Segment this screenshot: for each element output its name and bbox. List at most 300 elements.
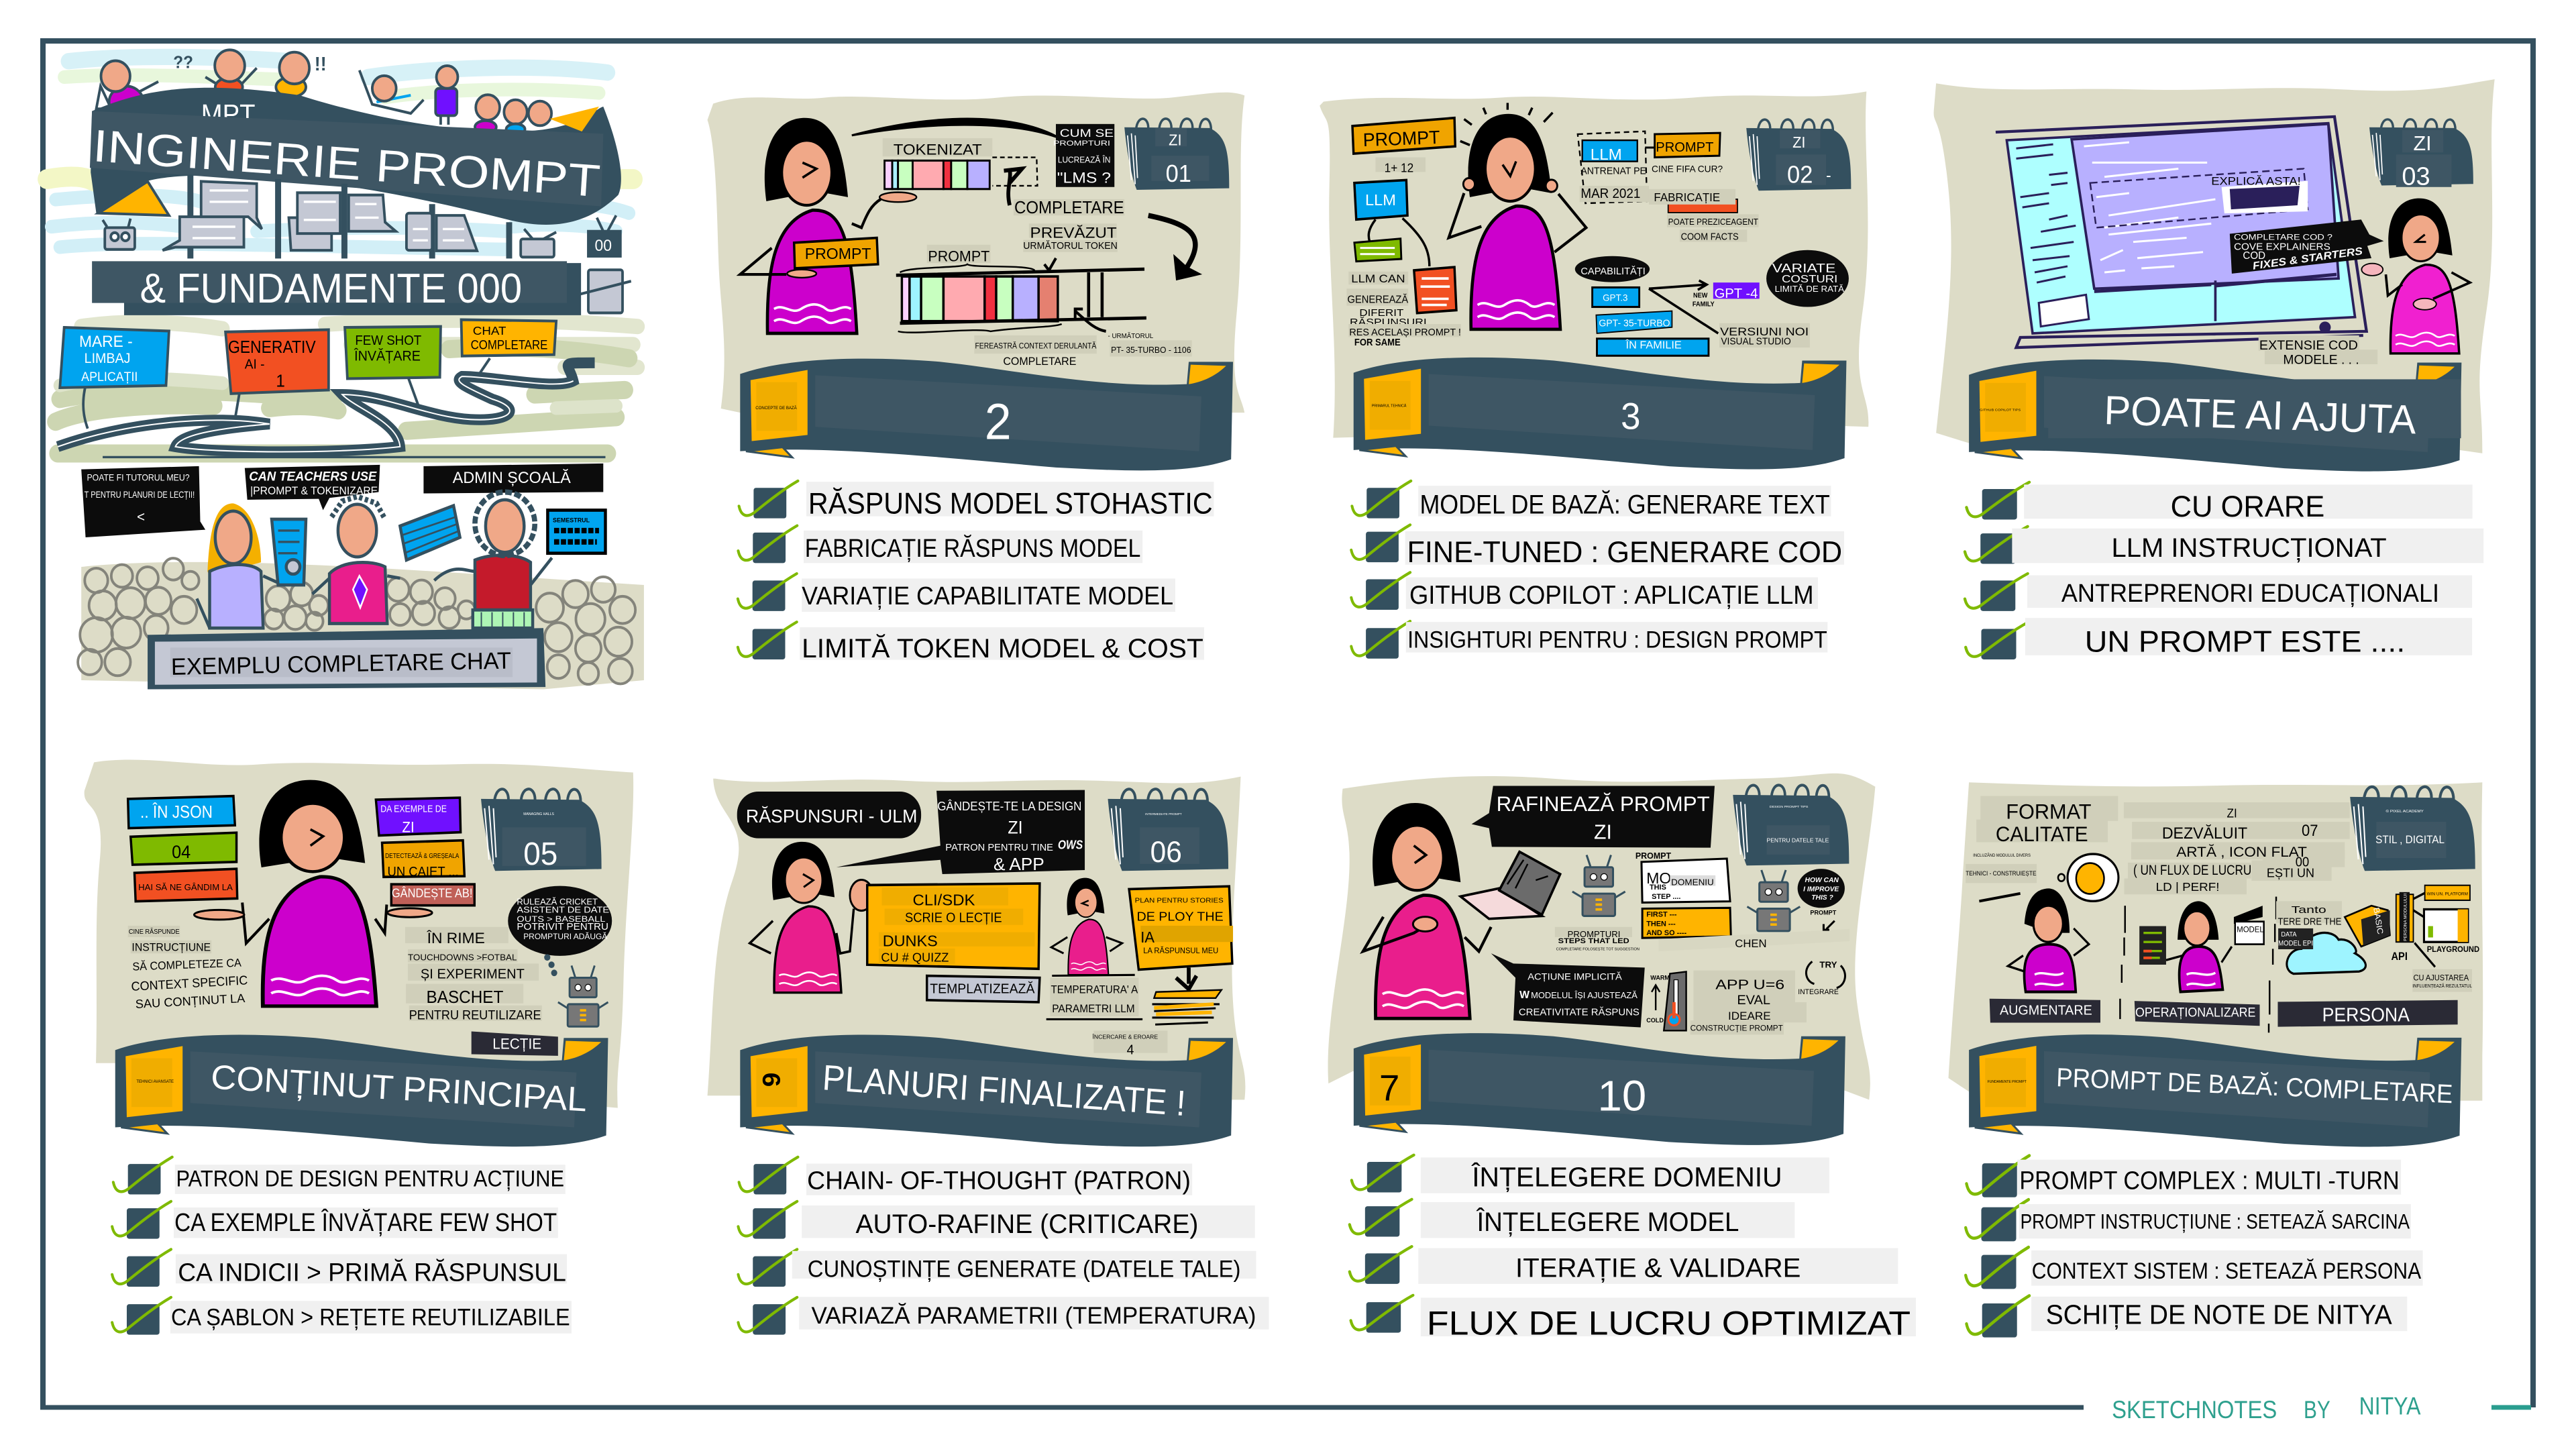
checklist: CA ȘABLON > REȚETE REUTILIZABILE — [171, 1305, 570, 1331]
llm fabricates: POATE PREZICEAGENT — [1668, 217, 1758, 227]
example sign: EXEMPLU COMPLETARE CHAT — [171, 648, 511, 680]
panel: day 7 refine — [1328, 773, 1916, 1342]
calendar: MANAGING HALLS — [523, 812, 554, 816]
checklist: CA EXEMPLE ÎNVĂȚARE FEW SHOT — [174, 1208, 557, 1236]
llm fabricates: MAR 2021 — [1580, 186, 1640, 201]
lesson tag — [472, 1032, 558, 1056]
try loop: INTEGRARE — [1798, 988, 1839, 996]
checklist: LLM INSTRUCȚIONAT — [2112, 533, 2387, 563]
speech boxes: POATE FI TUTORUL MEU? — [87, 472, 190, 483]
checklist: PROMPT COMPLEX : MULTI -TURN — [2019, 1166, 2400, 1195]
thought cloud and robot — [508, 886, 612, 1026]
cost cloud: LIMITĂ DE RATĂ — [1775, 284, 1844, 294]
robots: 00 — [595, 237, 612, 255]
left caption: RĂSPUNSURI — [1350, 316, 1427, 328]
prompt cards: DOMENIU — [1671, 877, 1714, 887]
trial and error: 4 — [1127, 1042, 1134, 1058]
templates tag — [927, 976, 1040, 1002]
middle caption: DEZVĂLUIT — [2162, 824, 2247, 842]
small person — [1051, 878, 1122, 975]
banner: CONCEPTE DE BAZĂ — [755, 405, 797, 411]
temperature speech: ACȚIUNE IMPLICITĂ — [1527, 971, 1623, 982]
thermometer: WARM — [1650, 975, 1670, 981]
persona tag — [2277, 1000, 2458, 1027]
cloud model and API — [2276, 885, 2479, 992]
middle caption: ZI — [2227, 806, 2237, 820]
augmentation tag: AUGMENTARE — [2000, 1003, 2092, 1018]
signature: SKETCHNOTES — [2112, 1395, 2277, 1424]
checklist: ÎNȚELEGERE DOMENIU — [1471, 1161, 1782, 1192]
temperature speech: CREATIVITATE RĂSPUNS — [1519, 1006, 1640, 1018]
sliding window diagram: - URMĂTORUL — [1108, 333, 1153, 340]
calendar — [481, 789, 602, 872]
cloud model and API: BASIC — [2371, 906, 2385, 935]
prompt cards: THIS — [1650, 883, 1666, 892]
checklist: CHAIN- OF-THOUGHT (PATRON) — [807, 1167, 1191, 1195]
calendar: DESIGN PROMPT TIPS — [1770, 805, 1808, 809]
checklist — [1350, 1155, 1916, 1342]
templates tag: TEMPLATIZEAZĂ — [930, 981, 1035, 997]
checklist: CU ORARE — [2171, 489, 2324, 523]
middle caption: EȘTI UN — [2267, 866, 2314, 880]
checklist — [112, 1157, 572, 1335]
thermometer: COLD — [1646, 1017, 1664, 1024]
operationalization tag: OPERAȚIONALIZARE — [2135, 1005, 2255, 1020]
speech box — [1472, 786, 1715, 848]
calendar: © PIXEL ACADEMY — [2385, 809, 2424, 814]
extension caption: MODELE . . . — [2283, 352, 2359, 367]
cloud model and API: PERSONA MODULULUI — [2403, 894, 2408, 941]
labels right — [376, 798, 474, 906]
sign: few shot — [345, 327, 441, 378]
banner: 7 — [1379, 1068, 1399, 1109]
design speech box: & APP — [994, 855, 1044, 874]
question box: "LMS ? — [1057, 170, 1111, 186]
checklist: MODEL DE BAZĂ: GENERARE TEXT — [1419, 490, 1830, 520]
capabilities tree: NEW — [1693, 292, 1708, 300]
right caption — [405, 927, 542, 1022]
sliding window diagram: PT- 35-TURBO - 1106 — [1111, 345, 1191, 355]
prompt cards: STEP .... — [1652, 893, 1680, 901]
signature: BY — [2304, 1395, 2330, 1424]
speech boxes: CAN TEACHERS USE — [249, 469, 377, 484]
llm fabricates: CINE FIFA CUR? — [1652, 164, 1723, 174]
person with laptop — [1363, 803, 1560, 1018]
speech bubble — [2230, 219, 2383, 274]
top-left caption: INCLUZÂND MODULUL DIVERS — [1973, 852, 2031, 858]
app captions: EVAL — [1737, 993, 1770, 1008]
right caption: ȘI EXPERIMENT — [421, 967, 525, 982]
banner: PLANURI FINALIZATE ! — [821, 1058, 1187, 1124]
sign: chat completion: COMPLETARE — [471, 337, 547, 352]
cloud model and API: INFLUENȚEAZĂ REZULTATUL — [2412, 982, 2472, 989]
calendar: ZI — [1792, 133, 1805, 151]
cloud model and API: CU AJUSTAREA — [2413, 973, 2469, 983]
speech bubble: FIXES & STARTERS — [2252, 246, 2363, 272]
extension caption: EXTENSIE COD — [2259, 338, 2358, 353]
operationalization tag — [2135, 1001, 2260, 1026]
banner — [740, 359, 1233, 470]
checklist: FLUX DE LUCRU OPTIMIZAT — [1427, 1305, 1911, 1342]
calendar — [2350, 787, 2475, 871]
subtitle banner: & FUNDAMENTE 000 — [140, 264, 522, 311]
try loop: TRY — [1819, 959, 1837, 969]
thought cloud and robot: POTRIVIT PENTRU — [517, 922, 608, 932]
left caption: CONTEXT SPECIFIC — [131, 973, 248, 994]
signature — [2112, 1392, 2421, 1424]
app captions: CONSTRUCȚIE PROMPT — [1690, 1023, 1783, 1032]
orange board — [867, 883, 1040, 969]
calendar: 02 — [1787, 161, 1813, 189]
panel: title: !! — [315, 53, 327, 74]
cloud model and API: Tanto — [2292, 904, 2326, 916]
capabilities tree: FAMILY — [1693, 301, 1715, 308]
question box: CUM SE — [1060, 127, 1114, 140]
lightbulb person — [2008, 854, 2118, 992]
checklist: SCHIȚE DE NOTE DE NITYA — [2046, 1300, 2392, 1330]
crowd — [78, 558, 635, 684]
prompt cards: AND SO ---- — [1646, 929, 1686, 937]
extension caption — [2259, 335, 2377, 367]
panel: title: ?? — [173, 53, 193, 72]
cloud model and API: TERE DRE THE — [2277, 916, 2341, 928]
capabilities tree: GPT- 35-TURBO — [1599, 318, 1670, 329]
right caption: PENTRU REUTILIZARE — [409, 1008, 541, 1022]
checklist — [1351, 481, 1844, 659]
sliding window diagram: PROMPT — [928, 248, 989, 265]
checklist — [1965, 482, 2483, 659]
sign: large language: APLICAȚII — [81, 369, 138, 384]
prompt cards — [1635, 851, 1731, 938]
prompt cards: FIRST --- — [1646, 911, 1677, 919]
sign: few shot: FEW SHOT — [355, 333, 421, 348]
banner — [1969, 1034, 2461, 1147]
tokenized diagram: TOKENIZAT — [894, 142, 982, 158]
chain strip: CHEN — [1735, 937, 1767, 950]
banner — [740, 1035, 1233, 1146]
right caption: BASCHET — [427, 989, 503, 1007]
prompt to llm — [1352, 118, 1456, 313]
trial and error: ÎNCERCARE & EROARE — [1091, 1034, 1158, 1040]
app captions: IDEARE — [1728, 1010, 1771, 1022]
banner: TEHNICI AVANSATE — [136, 1079, 174, 1084]
llm fabricates: LLM — [1591, 146, 1622, 163]
lesson tag: LECȚIE — [492, 1036, 541, 1053]
checklist: PATRON DE DESIGN PENTRU ACȚIUNE — [176, 1167, 564, 1192]
robot improve: HOW CAN — [1805, 877, 1839, 884]
signature: NITYA — [2359, 1392, 2421, 1420]
design speech box — [837, 790, 1085, 874]
middle caption: LD | PERF! — [2156, 880, 2220, 894]
right caption: ÎN RIME — [427, 929, 485, 947]
thought cloud and robot: OUTS > BASEBALL — [517, 914, 606, 924]
robot improve: THIS ? — [1811, 894, 1834, 902]
calendar: STIL , DIGITAL — [2375, 834, 2445, 846]
main banner — [90, 88, 621, 225]
calendar — [2369, 119, 2473, 191]
calendar: INTERMEDIATE PROMPT — [1145, 812, 1182, 816]
labels left — [128, 796, 237, 902]
orange board: SCRIE O LECȚIE — [905, 910, 1002, 926]
thought cloud and robot: ASISTENT DE DATE — [517, 904, 610, 915]
person with tokens: PROMPT — [805, 245, 871, 262]
sliding window diagram: PREVĂZUT — [1030, 224, 1117, 241]
capabilities tree — [1575, 256, 1810, 356]
speech box: RAFINEAZĂ PROMPT — [1497, 792, 1710, 816]
middle caption — [2124, 802, 2350, 894]
teachers: SEMESTRUL — [553, 517, 590, 524]
cost cloud: VARIATE — [1772, 262, 1836, 275]
top-left caption: TEHNICI - CONSTRUIEȘTE — [1966, 869, 2036, 877]
speech bubble: COD — [2243, 250, 2265, 262]
checklist: ANTREPRENORI EDUCAȚIONALI — [2061, 580, 2439, 608]
subtitle banner — [92, 261, 581, 315]
speech boxes: ADMIN ȘCOALĂ — [453, 468, 571, 487]
banner: CONȚINUT PRINCIPAL — [210, 1057, 588, 1119]
banner: PROMPT DE BAZĂ: COMPLETARE — [2056, 1063, 2453, 1109]
design speech box: PATRON PENTRU TINE — [945, 843, 1053, 853]
sign: generative: 1 — [276, 372, 285, 391]
checklist: VARIAZĂ PARAMETRII (TEMPERATURA) — [812, 1302, 1256, 1329]
speech boxes: T PENTRU PLANURI DE LECȚII! — [85, 490, 195, 500]
person with tokens — [740, 118, 916, 333]
speech boxes: |PROMPT & TOKENIZARE — [250, 484, 378, 497]
speech boxes — [81, 464, 603, 537]
checklist — [738, 481, 1214, 663]
sign: large language: MARE - — [79, 333, 133, 351]
cloud model and API: API — [2391, 951, 2408, 963]
temperature speech: W — [1519, 989, 1529, 1001]
temperature caption: TEMPERATURA' A — [1051, 984, 1138, 996]
left caption — [1346, 272, 1461, 348]
speech boxes: < — [137, 509, 145, 525]
llm fabricates — [1578, 131, 1759, 243]
banner — [1969, 360, 2461, 472]
robot improve: PROMPT — [1810, 910, 1837, 916]
speech bubble: COVE EXPLAINERS — [2234, 242, 2330, 253]
right caption: TOUCHDOWNS >FOTBAL — [408, 952, 517, 963]
calendar: PENTRU DATELE TALE — [1767, 837, 1829, 844]
app captions: APP U=6 — [1715, 977, 1784, 993]
checklist: ITERAȚIE & VALIDARE — [1515, 1254, 1801, 1283]
banner — [1354, 358, 1846, 470]
prompt to llm: 1+ 12 — [1385, 161, 1413, 174]
left caption: CINE RĂSPUNDE — [129, 927, 180, 936]
calendar: 01 — [1166, 160, 1191, 187]
temperature speech — [1491, 953, 1645, 1027]
sign: generative: AI - — [245, 357, 265, 372]
temperature caption — [1046, 975, 1142, 1019]
panel: day 6 plans — [708, 777, 1269, 1335]
top-left caption — [1966, 796, 2118, 901]
prompt to llm: LLM — [1365, 192, 1396, 209]
responses cloud — [737, 792, 921, 839]
orange board: CLI/SDK — [912, 892, 975, 909]
capabilities tree: ÎN FAMILIE — [1625, 339, 1682, 351]
checklist: GITHUB COPILOT : APLICAȚIE LLM — [1409, 581, 1814, 610]
left caption: FOR SAME — [1354, 337, 1401, 348]
question box — [1053, 124, 1114, 187]
speech box: ZI — [1594, 821, 1612, 843]
panel: day 1 concepts — [708, 93, 1244, 663]
robot teacher — [1555, 855, 1640, 951]
checklist: UN PROMPT ESTE .... — [2085, 625, 2405, 658]
banner: 2 — [985, 393, 1012, 450]
labels right: ZI — [402, 819, 415, 836]
thought cloud and robot: RULEAZĂ CRICKET — [517, 896, 598, 907]
prompt cards: THEN --- — [1646, 920, 1676, 928]
labels right: DA EXEMPLE DE — [380, 804, 447, 814]
teachers — [197, 492, 605, 628]
llm fabricates: COOM FACTS — [1681, 231, 1739, 243]
labels left: HAI SĂ NE GÂNDIM LA — [138, 882, 233, 892]
calendar — [1746, 119, 1851, 191]
sign: generative: GENERATIV — [228, 337, 316, 357]
trial and error — [1091, 1030, 1167, 1058]
capabilities tree: GPT.3 — [1603, 292, 1627, 303]
tokenized diagram — [852, 119, 1124, 217]
augmentation tag — [1990, 999, 2100, 1023]
left caption: SĂ COMPLETEZE CA — [132, 956, 241, 973]
plan box and stack: DE PLOY THE — [1137, 910, 1224, 924]
app captions — [1690, 971, 1807, 1034]
capabilities tree: VERSIUNI NOI — [1720, 325, 1809, 338]
robot teacher: STEPS THAT LED — [1558, 937, 1629, 945]
panel: day 3 how AI helps — [1934, 79, 2495, 659]
checklist: CUNOȘTINȚE GENERATE (DATELE TALE) — [808, 1256, 1241, 1283]
screen: EXPLICĂ ASTA! — [2211, 175, 2301, 188]
checklist: INSIGHTURI PENTRU : DESIGN PROMPT — [1407, 627, 1827, 653]
llm fabricates: FABRICAȚIE — [1654, 191, 1720, 204]
checklist: AUTO-RAFINE (CRITICARE) — [856, 1210, 1198, 1239]
labels left: 04 — [172, 841, 191, 862]
checklist: VARIAȚIE CAPABILITATE MODEL — [802, 582, 1173, 610]
banner — [1354, 1033, 1845, 1145]
checklist: PROMPT INSTRUCȚIUNE : SETEAZĂ SARCINA — [2021, 1210, 2410, 1234]
person shrug — [194, 780, 432, 1006]
banner: POATE AI AJUTA — [2103, 387, 2417, 442]
design speech box: GÂNDEȘTE-TE LA DESIGN — [937, 798, 1081, 813]
checklist — [738, 1157, 1269, 1335]
sign: chat completion — [462, 320, 556, 356]
calendar — [1108, 789, 1228, 871]
middle caption: ARTĂ , ICON FLAT — [2176, 844, 2307, 860]
cost cloud: COSTURI — [1782, 274, 1837, 285]
robot improve: I IMPROVE — [1803, 885, 1839, 893]
left caption: GENEREAZĂ — [1348, 294, 1409, 306]
prompt cards: PROMPT — [1635, 851, 1671, 861]
design speech box: OWS — [1058, 838, 1083, 852]
sign: large language — [60, 327, 169, 388]
robot improve — [1747, 869, 1845, 931]
calendar — [1733, 785, 1849, 865]
panel: day 8 basic prompt — [1948, 782, 2483, 1424]
labels right: GÂNDEȘTE AB! — [392, 885, 472, 900]
left caption: RES ACELAȘI PROMPT ! — [1349, 327, 1461, 338]
plan box and stack: PLAN PENTRU STORIES — [1135, 897, 1224, 905]
left caption — [128, 926, 248, 1011]
sign: chat completion: CHAT — [473, 324, 506, 337]
road map — [58, 358, 605, 457]
capabilities tree: GPT -4 — [1715, 286, 1758, 301]
calendar: 03 — [2402, 163, 2430, 191]
responses cloud: RĂSPUNSURI - ULM — [746, 805, 917, 826]
plan box and stack — [1129, 886, 1233, 1024]
labels left: .. ÎN JSON — [140, 803, 213, 822]
screen — [1996, 117, 2367, 347]
checklist: RĂSPUNS MODEL STOHASTIC — [808, 486, 1213, 521]
top-left caption: FORMAT — [2006, 800, 2092, 824]
plan box and stack: IA — [1140, 928, 1155, 946]
capabilities tree: CAPABILITĂȚI — [1580, 266, 1646, 277]
person thinking — [1449, 103, 1586, 329]
sign: large language: LIMBAJ — [85, 350, 131, 366]
robot teacher: PROMPTURI — [1568, 929, 1620, 939]
try loop — [1798, 959, 1845, 996]
banner: 10 — [1597, 1073, 1646, 1120]
prompt cards: MO — [1646, 869, 1671, 887]
robot teacher: COMPLETARE FOLOSEȘTE TOT SUGGESTION — [1556, 947, 1640, 951]
title text: INGINERIE PROMPT — [91, 120, 602, 207]
chain strip — [1658, 929, 1849, 951]
tokenized diagram: COMPLETARE — [1014, 199, 1124, 217]
cloud model and API: PLAYGROUND — [2427, 945, 2479, 954]
calendar: - — [1826, 167, 1831, 185]
llm fabricates: ANTRENAT PE — [1580, 166, 1646, 176]
question box: PROMPTURI — [1053, 140, 1110, 148]
cloud model and API: DATA — [2281, 931, 2297, 938]
main banner: MPT — [201, 99, 256, 129]
orange board: CU # QUIZZ — [881, 951, 949, 964]
orange board: DUNKS — [883, 932, 938, 949]
banner: FUNDAMENTE PROMPT — [1988, 1080, 2027, 1084]
calendar: ZI — [1169, 131, 1182, 148]
checklist: FINE-TUNED : GENERARE COD — [1407, 535, 1842, 569]
checklist — [1966, 1156, 2423, 1338]
left caption: SAU CONȚINUT LA — [135, 991, 246, 1011]
plan box and stack: LA RĂSPUNSUL MEU — [1143, 947, 1218, 955]
question box: LUCREAZĂ ÎN — [1058, 154, 1111, 164]
banner: 3 — [1621, 395, 1640, 437]
people on banner — [97, 50, 551, 135]
temperature caption: PARAMETRI LLM — [1052, 1002, 1135, 1015]
left caption: LLM CAN — [1351, 272, 1405, 285]
sliding window diagram — [896, 215, 1202, 368]
checklist: CA INDICII > PRIMĂ RĂSPUNSUL — [178, 1258, 566, 1287]
ops person — [2120, 897, 2276, 1032]
banner: 6 — [757, 1073, 784, 1087]
middle caption: ( UN FLUX DE LUCRU — [2133, 862, 2251, 878]
cost cloud — [1766, 250, 1849, 307]
sign: few shot: ÎNVĂȚARE — [354, 348, 421, 364]
banner: GITHUB COPILOT TIPS — [1980, 409, 2021, 413]
llm fabricates: PROMPT — [1656, 140, 1713, 155]
sign: generative — [225, 329, 329, 394]
example sign — [148, 628, 545, 690]
calendar: 06 — [1150, 835, 1182, 869]
thought cloud and robot: PROMPTURI ADĂUGĂ — [523, 932, 607, 941]
checklist: ÎNȚELEGERE MODEL — [1477, 1207, 1739, 1237]
calendar — [1124, 119, 1229, 190]
banner — [115, 1035, 608, 1146]
robots — [103, 215, 631, 313]
checklist: CONTEXT SISTEM : SETEAZĂ PERSONA — [2032, 1258, 2422, 1283]
capabilities tree: VISUAL STUDIO — [1721, 336, 1791, 347]
top-left caption: CALITATE — [1996, 823, 2088, 846]
cloud model and API: MODEL EPI — [2278, 939, 2313, 948]
speech bubble: COMPLETARE COD ? — [2234, 233, 2332, 242]
design speech box: ZI — [1008, 817, 1023, 838]
